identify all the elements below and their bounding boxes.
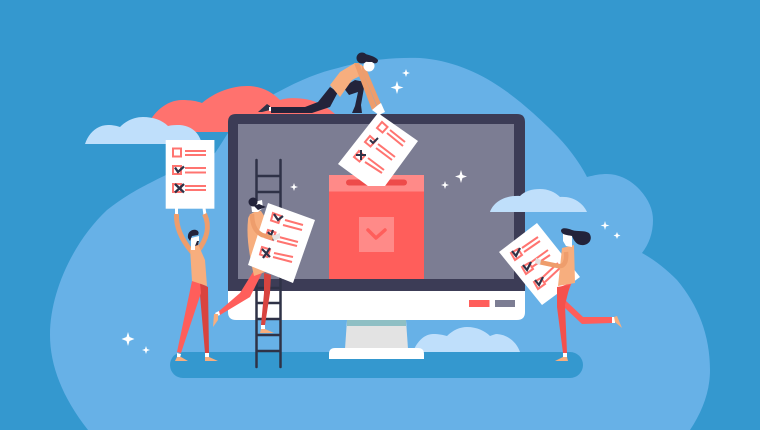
big background cloud — [50, 58, 710, 430]
hand — [372, 103, 385, 115]
red clouds behind monitor — [145, 86, 336, 132]
back shoe — [258, 104, 270, 112]
person: on ladder holding ballot — [213, 198, 274, 333]
ballot — [499, 223, 580, 305]
sparkles right — [600, 221, 620, 239]
standing shoe — [555, 357, 568, 361]
arm — [539, 252, 566, 266]
front leg — [177, 281, 201, 353]
sparkles left — [122, 332, 150, 354]
rear sock — [215, 311, 220, 316]
hand — [272, 233, 280, 241]
hair — [356, 52, 368, 64]
sparkles on screen — [290, 170, 467, 191]
monitor bezel — [228, 114, 525, 291]
arms — [176, 214, 192, 252]
beard — [254, 204, 266, 210]
arm — [354, 63, 377, 110]
ballot: being dropped — [338, 113, 418, 186]
hand — [535, 258, 541, 265]
head — [563, 232, 572, 247]
beard — [195, 241, 199, 246]
hair — [188, 230, 199, 241]
front leg — [218, 272, 262, 315]
head — [191, 236, 199, 250]
cloud: upper left — [85, 117, 202, 144]
ballot box — [329, 175, 424, 279]
standing sock — [563, 353, 567, 357]
sock — [269, 107, 272, 111]
monitor stand — [329, 320, 424, 359]
indicator lights — [469, 300, 515, 307]
monitor — [228, 114, 525, 359]
torso — [247, 211, 270, 276]
person: top kneeling — [258, 52, 385, 115]
ladder sock — [261, 325, 265, 330]
torso — [558, 245, 575, 286]
far leg — [343, 80, 365, 113]
far arm — [360, 66, 381, 106]
ladder shoe — [260, 329, 274, 333]
raised leg — [560, 282, 612, 324]
person: left holding ballot — [175, 208, 218, 361]
ground platform — [170, 352, 583, 378]
raised shoe — [614, 316, 622, 328]
cloud: right — [490, 189, 587, 212]
near leg — [271, 87, 338, 113]
hair — [561, 228, 591, 245]
standing leg — [557, 285, 570, 353]
ladder — [256, 160, 280, 367]
head — [364, 60, 374, 72]
ballot: held by ladder person — [248, 203, 315, 283]
ballot: held by left person — [166, 140, 214, 209]
rear shoe — [213, 314, 218, 327]
sparkles upper — [390, 69, 410, 94]
back leg — [261, 273, 271, 325]
hands — [176, 208, 205, 215]
monitor chin — [228, 285, 525, 320]
back leg — [200, 283, 209, 353]
monitor screen — [238, 124, 514, 279]
shoes — [175, 357, 188, 361]
cloud: bottom center — [413, 327, 520, 352]
raised sock — [612, 317, 615, 323]
person: right with ballot — [499, 223, 622, 361]
arm over ballot — [252, 214, 273, 238]
socks — [177, 353, 209, 358]
torso — [190, 244, 207, 286]
hair — [248, 198, 258, 206]
torso — [330, 63, 362, 97]
head — [251, 200, 263, 212]
